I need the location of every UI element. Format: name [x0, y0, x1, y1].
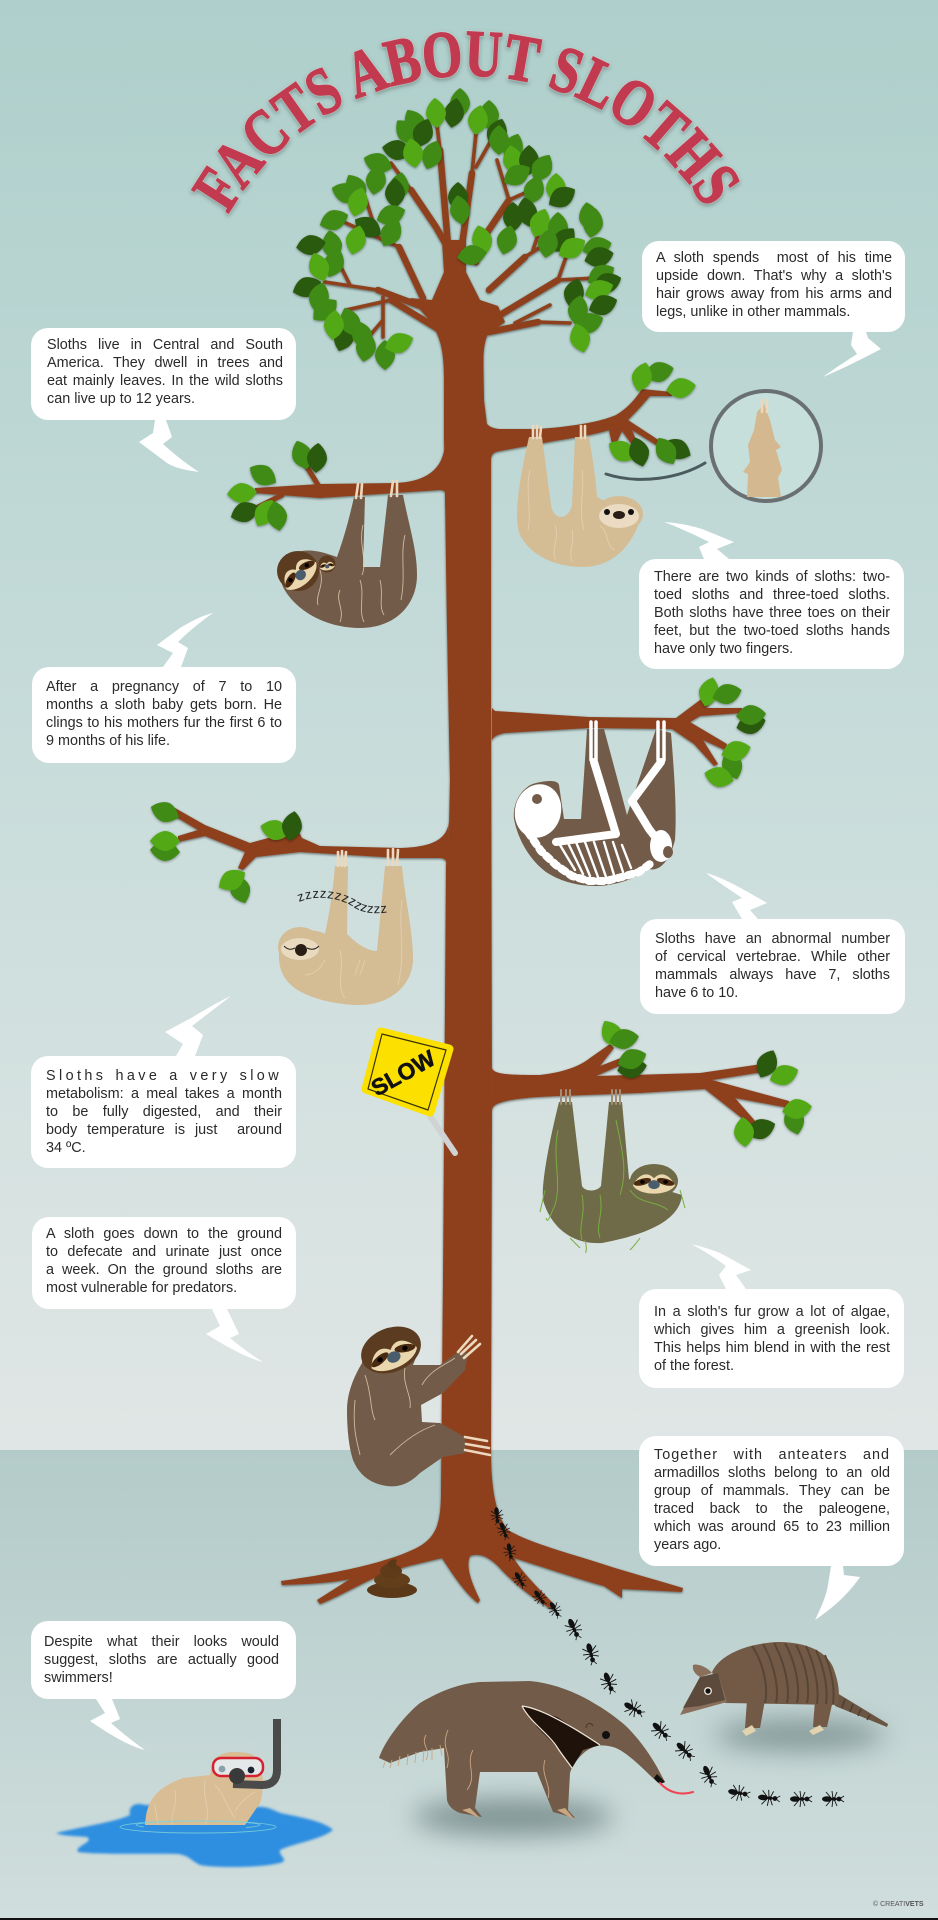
- bolt 5: [706, 873, 767, 919]
- callout: swimmers: [31, 1621, 296, 1699]
- callout: sloth babies: [32, 667, 296, 763]
- callout: metabolism: [31, 1056, 296, 1168]
- swimming sloth: [56, 1719, 333, 1867]
- callout: relatives: years ago.: [654, 1537, 721, 1553]
- callout: relatives: which was around 65 to 23 million: [654, 1519, 890, 1535]
- sloth with baby: [277, 481, 417, 628]
- magnifier: sloth hair: [606, 391, 821, 501]
- snoring z's: zzzzzzzzzzzzz: [298, 890, 387, 914]
- crown limbs: [325, 117, 595, 380]
- branch leaves: [147, 358, 814, 1148]
- callout: algae: In a sloth's fur grow a lot of algae,: [654, 1304, 890, 1320]
- callout: where sloths live: America. They dwell in trees and: [47, 355, 283, 371]
- sky background: [0, 0, 938, 1450]
- skeleton sloth: [509, 722, 676, 886]
- callout: where sloths live: eat mainly leaves. In the wild sloths: [47, 373, 283, 389]
- callout: going to the ground: [32, 1217, 296, 1309]
- callout: sloth babies: 9 months of his life.: [46, 733, 170, 749]
- callout: cervical vertebrae: have 6 to 10.: [655, 985, 738, 1001]
- armadillo: [680, 1642, 888, 1751]
- callout: going to the ground: most vulnerable for predators.: [46, 1280, 237, 1296]
- callout: cervical vertebrae: mammals always have 7, sloths: [655, 967, 890, 983]
- bolt 9: [815, 1566, 860, 1620]
- bolt 7: [206, 1309, 263, 1362]
- callout: relatives: group of mammals. They can be: [654, 1483, 890, 1499]
- callout: cervical vertebrae: Sloths have an abnormal number: [655, 931, 890, 947]
- callout: two kinds of sloths: Both sloths have three toes on their: [654, 605, 890, 621]
- callout: two kinds of sloths: toed sloths and three-toed sloths.: [654, 587, 890, 603]
- callout: two kinds of sloths: have only two fingers.: [654, 641, 793, 657]
- bolt 3: [823, 332, 881, 377]
- callout: metabolism: to be fully digested, and their: [46, 1104, 282, 1120]
- bolt 1: [139, 420, 199, 472]
- slow sign: [366, 1032, 455, 1153]
- title: FACTS ABOUT SLOTHS: [189, 30, 742, 218]
- callout: swimmers: Despite what their looks would: [44, 1634, 279, 1650]
- callout: where sloths live: can live up to 12 years.: [47, 391, 195, 407]
- bolt 10: [90, 1699, 145, 1750]
- callout: metabolism: metabolism: a meal takes a month: [46, 1086, 282, 1102]
- snorkel mask: [213, 1758, 263, 1776]
- callout: metabolism: Sloths have a very slow: [46, 1068, 282, 1084]
- callout: relatives: Together with anteaters and: [654, 1447, 890, 1463]
- callout: upside down: A sloth spends most of his time: [656, 250, 892, 266]
- tree: [171, 117, 789, 1610]
- callout: where sloths live: [31, 328, 296, 420]
- callout: two kinds of sloths: There are two kinds of sloths: two-: [654, 569, 890, 585]
- branch: left middle: [171, 808, 449, 870]
- climbing sloth: [347, 1318, 490, 1486]
- tan sloth: [517, 426, 643, 567]
- callout: going to the ground: A sloth goes down to the ground: [46, 1226, 282, 1242]
- callout: relatives: [639, 1436, 904, 1566]
- branch: left upper: [254, 438, 447, 507]
- branch: right middle: [492, 690, 742, 766]
- callout: upside down: hair grows away from his arms and: [656, 286, 892, 302]
- callout: relatives: traced back to the paleogene,: [654, 1501, 890, 1517]
- callout: algae: This helps him blend in with the rest: [654, 1340, 890, 1356]
- snoring z's: [298, 848, 400, 914]
- callout: two kinds of sloths: [639, 559, 904, 669]
- algae sloth: [540, 1090, 685, 1253]
- callout: upside down: upside down. That's why a sloth's: [656, 268, 892, 284]
- callout: where sloths live: Sloths live in Central and South: [47, 337, 283, 353]
- callout: two kinds of sloths: feet, but the two-toed sloths hands: [654, 623, 890, 639]
- sleeping sloth: [278, 848, 424, 1045]
- bolt 8: [691, 1244, 751, 1289]
- callout: upside down: [642, 241, 905, 332]
- callout: metabolism: 34 ºC.: [46, 1140, 86, 1156]
- callout: sloth babies: clings to his mothers fur the first 6 to: [46, 715, 282, 731]
- skeleton bones: [509, 722, 673, 881]
- callout: swimmers: suggest, sloths are actually good: [44, 1652, 279, 1668]
- callout: metabolism: body temperature is just around: [46, 1122, 282, 1138]
- callout: going to the ground: to defecate and urinate just once: [46, 1244, 282, 1260]
- slow sign: SLOW: [367, 1045, 440, 1101]
- callout: sloth babies: months a sloth baby gets born. He: [46, 697, 282, 713]
- callout: relatives: armadillos sloths belong to an old: [654, 1465, 890, 1481]
- callout: algae: of the forest.: [654, 1358, 734, 1374]
- credit: © CREATIVETS: [873, 1900, 924, 1908]
- ground: [0, 1450, 938, 1918]
- ant trail: [490, 1507, 844, 1807]
- callout: algae: which gives him a greenish look.: [654, 1322, 890, 1338]
- bolt 2: [157, 613, 213, 667]
- bolt 4: [664, 522, 734, 559]
- trunk and roots: [281, 340, 683, 1610]
- callout: cervical vertebrae: of cervical vertebrae. While other: [655, 949, 890, 965]
- branch: right lower: [492, 1044, 789, 1126]
- callout: going to the ground: a week. On the ground sloths are: [46, 1262, 282, 1278]
- water puddle: [56, 1804, 333, 1867]
- callout: swimmers: swimmers!: [44, 1670, 113, 1686]
- callout: sloth babies: After a pregnancy of 7 to 10: [46, 679, 282, 695]
- anteater: [379, 1681, 693, 1835]
- callout: cervical vertebrae: [640, 919, 905, 1014]
- callout: algae: [639, 1289, 904, 1388]
- poop: [367, 1559, 417, 1598]
- branch: right upper: [482, 389, 672, 460]
- speech bolts: [90, 332, 881, 1750]
- bolt 6: [165, 996, 231, 1056]
- callout: upside down: legs, unlike in other mammals.: [656, 304, 850, 320]
- canopy leaves: [289, 88, 625, 370]
